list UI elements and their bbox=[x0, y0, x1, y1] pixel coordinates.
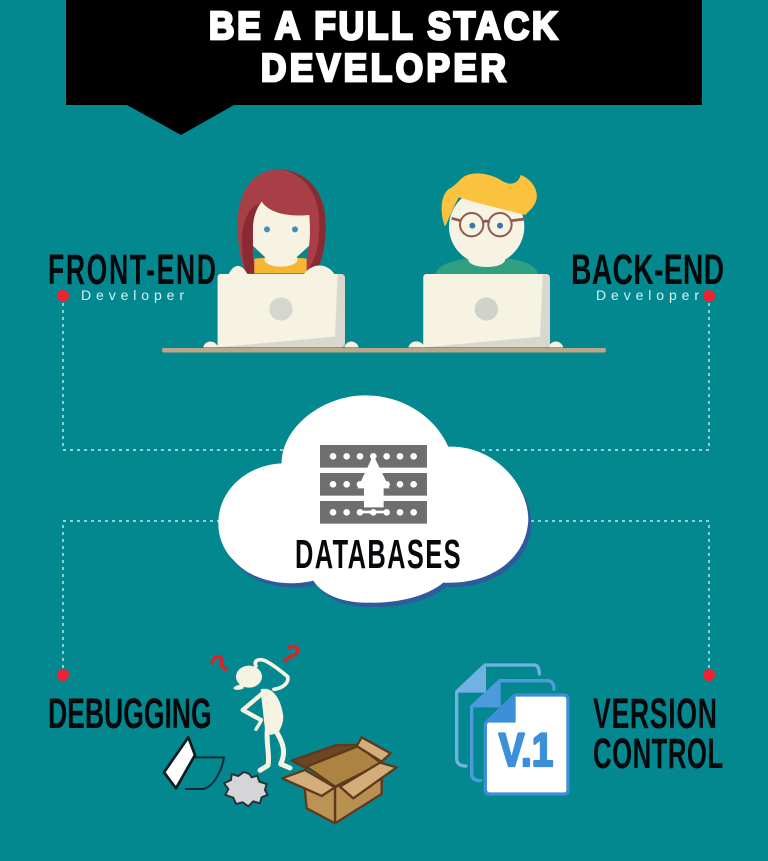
title: BE A FULL STACK bbox=[209, 3, 557, 47]
label: version control bbox=[593, 690, 723, 778]
label: version control: VERSION bbox=[593, 690, 717, 738]
label: front-end developer: FRONT-END bbox=[48, 246, 216, 294]
illustration: back-end developer bbox=[408, 173, 563, 347]
version label: V.1 bbox=[499, 724, 553, 777]
desk bbox=[162, 348, 606, 352]
dashed connectors bbox=[63, 296, 709, 675]
label: databases: DATABASES bbox=[295, 532, 461, 578]
label: version control: CONTROL bbox=[593, 729, 723, 778]
title: DEVELOPER bbox=[261, 45, 506, 89]
icon: open laptop bbox=[164, 737, 224, 789]
title banner bbox=[66, 0, 702, 135]
label: debugging: DEBUGGING bbox=[48, 690, 212, 738]
icon: gear bbox=[224, 772, 268, 806]
figure: confused person bbox=[233, 660, 290, 770]
label: back-end developer: BACK-END bbox=[571, 245, 724, 293]
icon: database servers bbox=[320, 445, 427, 524]
illustration: debugging bbox=[164, 646, 397, 823]
icon: question marks bbox=[212, 646, 298, 669]
illustration: front-end developer bbox=[203, 169, 359, 347]
icon: version control documents bbox=[457, 665, 568, 794]
label: back-end developer: Developer bbox=[596, 287, 699, 303]
title bbox=[209, 3, 557, 89]
icon: cardboard box bbox=[282, 737, 397, 823]
databases cloud bbox=[218, 395, 531, 607]
label: front-end developer: Developer bbox=[81, 287, 184, 303]
red dots bbox=[57, 290, 715, 681]
